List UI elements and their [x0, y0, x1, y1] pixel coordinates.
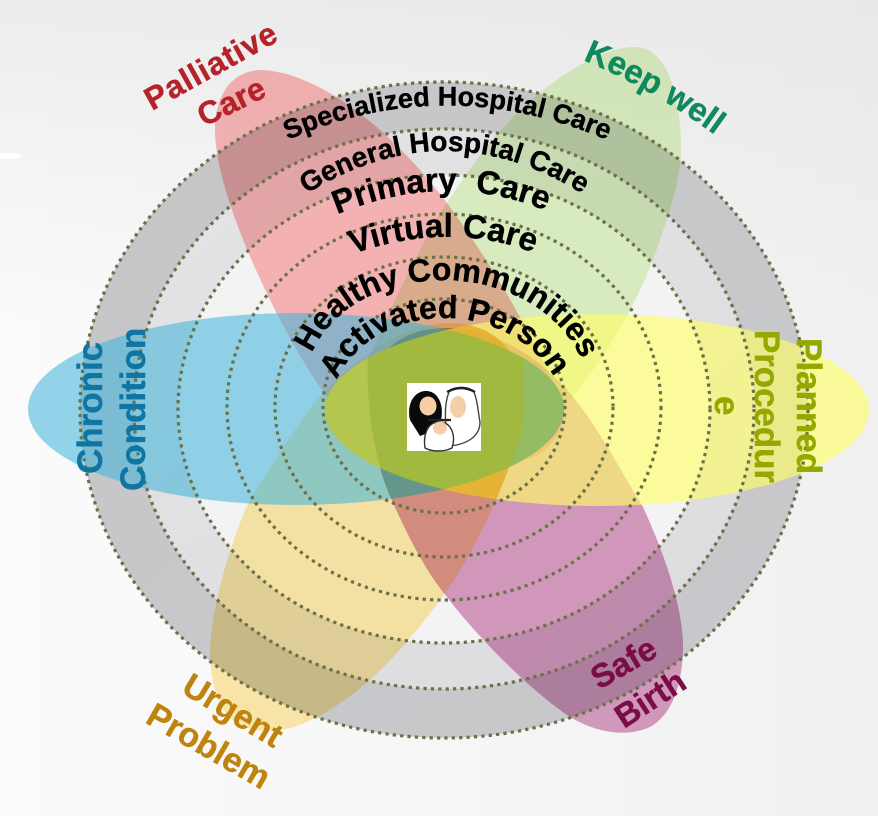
dotted ring lines [80, 82, 808, 738]
gold overlap band [443, 325, 510, 500]
petal: planned procedure [325, 314, 869, 506]
label: safe birth [584, 629, 692, 735]
label: chronic condition: Condition [114, 328, 153, 491]
label: chronic condition: Chronic [71, 342, 110, 474]
petal: urgent problem [210, 323, 523, 731]
label: safe birth: Safe [584, 629, 663, 696]
level: specialized hospital care: Specialized Hospital Care [284, 86, 610, 138]
label: planned procedure: e [707, 396, 746, 415]
petal: palliative care [215, 70, 565, 460]
label: urgent problem: Urgent [176, 666, 289, 755]
level: activated person: Activated Person [322, 294, 566, 380]
label: planned procedure: Procedur [747, 330, 786, 483]
level: general hospital care: General Hospital Care [300, 132, 587, 192]
center overlap lens [325, 330, 564, 490]
level: virtual care: Virtual Care [346, 212, 536, 252]
label: urgent problem: Problem [140, 696, 277, 797]
label: planned procedure: Planned [789, 338, 828, 474]
label: planned procedure [707, 330, 828, 483]
label: palliative care: Care [191, 70, 271, 133]
level: healthy communities: Healthy Communities [293, 259, 594, 356]
care level labels [284, 86, 610, 380]
icon: family [407, 383, 481, 451]
teal overlap band [380, 328, 447, 499]
label: safe birth: Birth [608, 662, 692, 735]
label: keep well: Keep well [584, 40, 728, 134]
label: chronic condition [71, 328, 153, 491]
level: primary care: Primary Care [330, 170, 549, 214]
concentric care rings [80, 82, 808, 738]
petal: keep well [352, 47, 681, 460]
petal: chronic condition [28, 313, 564, 505]
petal: safe birth [370, 328, 683, 733]
label: palliative care: Palliative [138, 15, 283, 117]
